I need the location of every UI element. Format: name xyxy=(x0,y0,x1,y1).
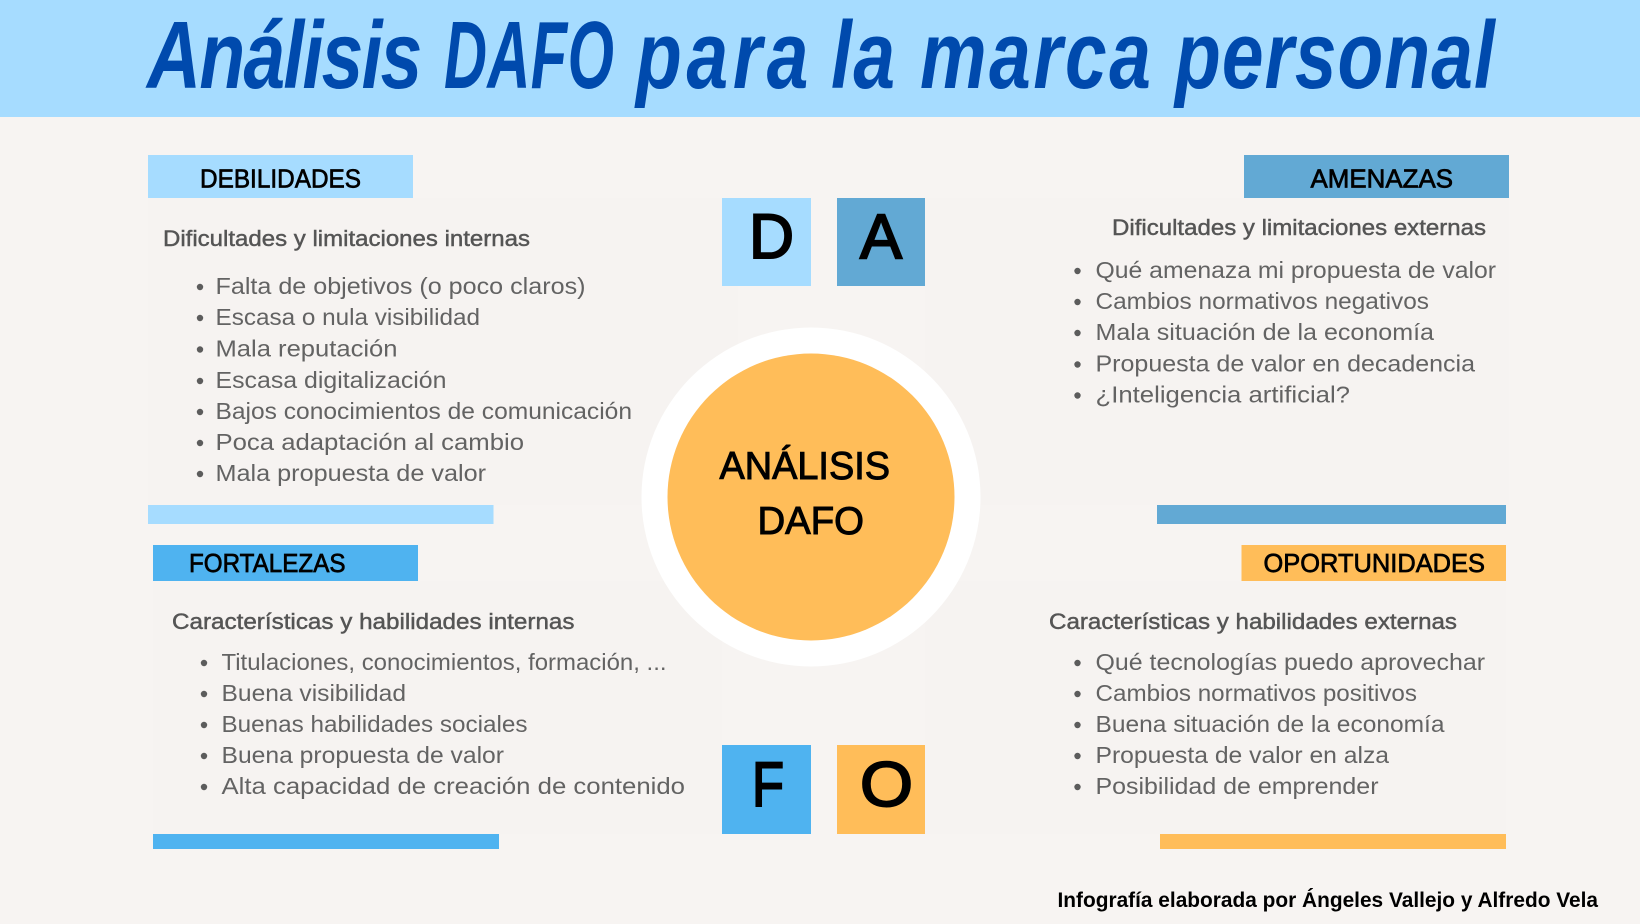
letter tile O xyxy=(837,745,925,834)
oportunidades list: Propuesta de valor en alza xyxy=(1096,742,1389,768)
letter tile D xyxy=(722,198,811,286)
title: Análisis xyxy=(145,2,422,109)
debilidades list: Escasa o nula visibilidad xyxy=(216,304,480,330)
fortalezas list xyxy=(201,649,685,799)
panel: amenazas xyxy=(925,155,1509,524)
debilidades list: Bajos conocimientos de comunicación xyxy=(216,398,632,424)
fortalezas list: Buena visibilidad xyxy=(222,680,406,706)
amenazas label xyxy=(1244,155,1509,198)
center text: ANÁLISIS xyxy=(720,445,890,488)
fortalezas label: FORTALEZAS xyxy=(189,548,346,578)
amenazas list: Mala situación de la economía xyxy=(1096,319,1434,345)
oportunidades list xyxy=(1074,649,1485,799)
oportunidades list: Buena situación de la economía xyxy=(1096,711,1445,737)
oportunidades list: Posibilidad de emprender xyxy=(1096,773,1379,799)
debilidades bar xyxy=(148,505,494,524)
debilidades label: DEBILIDADES xyxy=(200,164,361,194)
fortalezas list: Alta capacidad de creación de contenido xyxy=(222,773,685,799)
title: para xyxy=(634,2,808,109)
amenazas list: Qué amenaza mi propuesta de valor xyxy=(1096,257,1496,283)
debilidades list: Falta de objetivos (o poco claros) xyxy=(216,273,586,299)
amenazas list: Cambios normativos negativos xyxy=(1096,288,1429,314)
fortalezas list: Titulaciones, conocimientos, formación, ... xyxy=(222,649,666,675)
title xyxy=(145,1,1497,109)
center text: DAFO xyxy=(758,500,864,543)
oportunidades list: Qué tecnologías puedo aprovechar xyxy=(1096,649,1485,675)
oportunidades label: OPORTUNIDADES xyxy=(1264,548,1485,578)
letter tile F xyxy=(722,745,811,834)
amenazas list: Propuesta de valor en decadencia xyxy=(1096,350,1475,376)
title: DAFO xyxy=(444,1,614,108)
header banner xyxy=(0,0,1640,117)
letter tile A: A xyxy=(860,202,902,272)
title: marca xyxy=(920,2,1151,109)
letter tile A xyxy=(837,198,925,286)
panel: debilidades xyxy=(148,155,738,524)
fortalezas list: Buena propuesta de valor xyxy=(222,742,504,768)
debilidades subheading: Dificultades y limitaciones internas xyxy=(163,226,530,251)
debilidades list: Escasa digitalización xyxy=(216,367,446,393)
oportunidades list: Cambios normativos positivos xyxy=(1096,680,1417,706)
panel: oportunidades xyxy=(925,545,1506,849)
center circle xyxy=(642,328,980,666)
letter tile D: D xyxy=(749,202,794,272)
oportunidades bar xyxy=(1160,834,1506,849)
amenazas list xyxy=(1074,257,1496,408)
fortalezas label xyxy=(153,545,418,581)
debilidades label xyxy=(148,155,413,198)
letter tile F: F xyxy=(752,750,784,820)
fortalezas list: Buenas habilidades sociales xyxy=(222,711,528,737)
oportunidades subheading: Características y habilidades externas xyxy=(1049,609,1457,634)
footer credit: Infografía elaborada por Ángeles Vallejo y Alfredo Vela xyxy=(1058,889,1598,912)
title: personal xyxy=(1173,2,1497,109)
center text xyxy=(720,445,890,543)
amenazas bar xyxy=(1157,505,1506,524)
letter tile O: O xyxy=(860,750,913,820)
debilidades list: Mala propuesta de valor xyxy=(216,460,486,486)
fortalezas bar xyxy=(153,834,499,849)
amenazas subheading: Dificultades y limitaciones externas xyxy=(1112,215,1486,240)
fortalezas subheading: Características y habilidades internas xyxy=(172,609,574,634)
debilidades list: Poca adaptación al cambio xyxy=(216,429,524,455)
debilidades list xyxy=(197,273,632,486)
debilidades list: Mala reputación xyxy=(216,336,398,362)
amenazas label: AMENAZAS xyxy=(1310,164,1453,194)
amenazas list: ¿Inteligencia artificial? xyxy=(1096,382,1350,408)
title: la xyxy=(831,2,895,109)
panel: fortalezas xyxy=(153,545,722,849)
